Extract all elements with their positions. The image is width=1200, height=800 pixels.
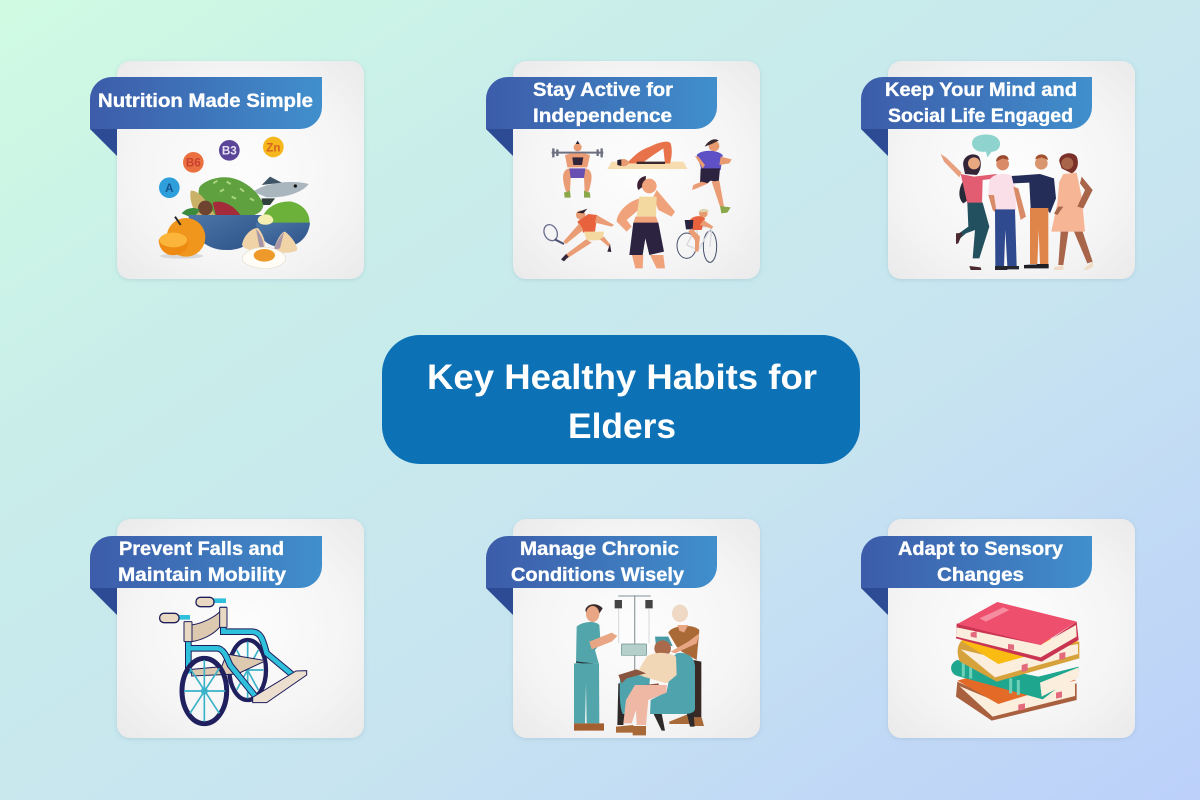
front wheel xyxy=(182,658,227,724)
figure: jogger xyxy=(692,139,732,213)
title: Elders xyxy=(568,407,676,446)
illustration: exercising women xyxy=(541,139,732,268)
panel: falls and mobility xyxy=(90,519,364,738)
illustration: stack of books xyxy=(951,602,1079,721)
heading xyxy=(898,539,1063,586)
figure: patient in armchair xyxy=(616,637,695,735)
icon: red book xyxy=(956,602,1079,662)
icon: footrest xyxy=(253,671,307,703)
ribbon xyxy=(486,536,717,615)
heading: Nutrition Made Simple xyxy=(98,91,313,112)
heading: Manage Chronic xyxy=(520,539,679,560)
ribbon xyxy=(486,77,717,156)
icon: fish xyxy=(253,177,309,205)
icon: IV stand xyxy=(618,595,651,670)
icon: orange xyxy=(159,217,205,259)
title panel xyxy=(382,335,860,464)
heading xyxy=(511,539,684,586)
title xyxy=(427,358,817,446)
heading: Changes xyxy=(937,565,1024,586)
figure: cyclist xyxy=(677,209,717,262)
panel: mind and social life xyxy=(861,61,1135,279)
frame xyxy=(188,607,297,700)
figure: weightlifter xyxy=(552,141,603,198)
figure: nurse xyxy=(574,604,617,731)
heading: Prevent Falls and xyxy=(119,539,284,560)
heading xyxy=(118,539,286,586)
title: Key Healthy Habits for xyxy=(427,358,817,397)
ribbon xyxy=(90,536,322,615)
icon: shells xyxy=(242,228,297,253)
heading: Stay Active for xyxy=(533,80,674,101)
ribbon xyxy=(861,536,1092,615)
heading: Independence xyxy=(533,106,672,127)
illustration: group of friends xyxy=(941,135,1093,270)
heading: Keep Your Mind and xyxy=(885,80,1077,101)
illustration: wheelchair xyxy=(160,597,307,724)
icon: orange book xyxy=(956,673,1077,721)
panel: stay active xyxy=(486,61,760,279)
back wheel xyxy=(229,640,266,700)
figure: woman in peach dress xyxy=(1051,153,1093,270)
frame colour xyxy=(178,601,297,700)
figure: man in navy sweater xyxy=(1012,154,1056,268)
illustration: infusion care scene xyxy=(574,595,704,735)
icon: salad bowl xyxy=(182,177,263,250)
icon: vitamin B3: B3 xyxy=(222,145,237,158)
icon: backrest clamps xyxy=(184,607,227,642)
icon: vitamin B3 xyxy=(219,140,240,161)
icon: fried egg xyxy=(242,247,286,269)
heading xyxy=(533,80,674,127)
icon: vitamin B6 xyxy=(183,152,204,173)
icon: speech bubble xyxy=(972,135,1000,157)
heading: Conditions Wisely xyxy=(511,565,684,586)
figure: tennis player xyxy=(541,209,614,261)
heading: Adapt to Sensory xyxy=(898,539,1063,560)
icon: apple bowl xyxy=(256,201,310,247)
heading: Maintain Mobility xyxy=(118,565,286,586)
icon: green book xyxy=(951,660,1079,699)
icon: vitamin A xyxy=(159,177,180,198)
figure: caregiver xyxy=(668,605,704,726)
figure: man in pink shirt xyxy=(988,155,1026,270)
figure: woman waving xyxy=(941,154,997,270)
ribbon xyxy=(90,77,322,156)
panel: chronic conditions xyxy=(486,519,760,738)
icon: seat xyxy=(192,654,266,676)
panel: sensory changes xyxy=(861,519,1135,738)
figure: central woman xyxy=(617,176,675,268)
icon: vitamin B6: B6 xyxy=(186,157,201,170)
icon: vitamin A: A xyxy=(165,182,174,195)
heading xyxy=(885,80,1077,127)
icon: backrest xyxy=(192,612,220,642)
heading: Social Life Engaged xyxy=(888,106,1073,127)
ribbon xyxy=(861,77,1092,156)
figure: yoga bridge pose xyxy=(607,142,687,169)
illustration: food bowls and vitamins xyxy=(159,137,310,269)
icon: vitamin Zn: Zn xyxy=(266,141,280,154)
icon: vitamin Zn xyxy=(263,137,284,157)
icon: yellow book xyxy=(958,634,1079,682)
panel: nutrition xyxy=(90,61,364,279)
icon: handles xyxy=(160,597,214,623)
